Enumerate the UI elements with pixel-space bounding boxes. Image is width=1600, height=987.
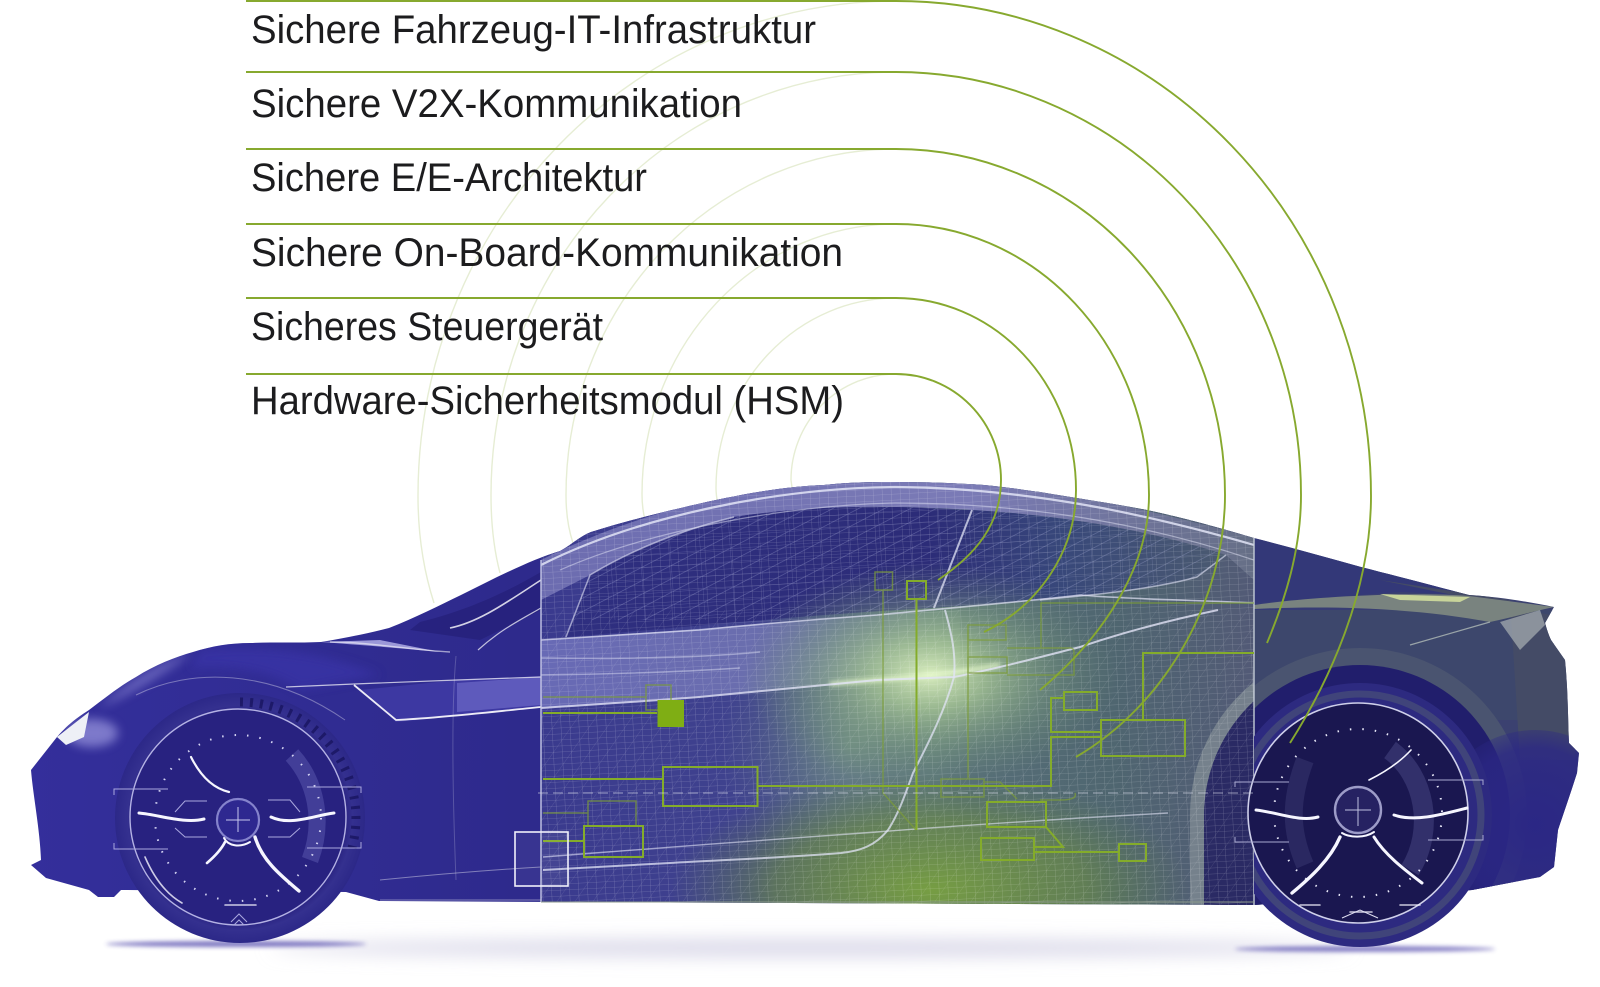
tread marks	[240, 702, 356, 848]
white marker box	[515, 832, 568, 886]
spokes	[139, 757, 334, 905]
brake disc	[292, 755, 317, 860]
spokes	[1256, 750, 1467, 912]
technical brackets	[1235, 780, 1483, 918]
roof band	[541, 478, 1254, 600]
circuit diagram	[543, 572, 1254, 861]
rear body shading	[1254, 538, 1579, 905]
wireframe panel	[541, 470, 1254, 910]
dim modules	[543, 572, 1254, 830]
window glass	[566, 507, 1226, 637]
label: Sichere Fahrzeug-IT-Infrastruktur: Sichere Fahrzeug-IT-Infrastruktur	[251, 8, 816, 52]
leader: on-board communication	[246, 224, 1149, 690]
rear arch in panel	[1190, 682, 1254, 910]
front fender highlights	[66, 572, 541, 747]
rim circle	[130, 709, 346, 925]
body creases	[541, 487, 1254, 870]
leader lines	[246, 1, 1371, 757]
leader: vehicle IT infrastructure	[246, 1, 1371, 743]
rim	[1248, 703, 1468, 923]
rear wheel	[1228, 683, 1492, 947]
label: Sichere V2X-Kommunikation: Sichere V2X-Kommunikation	[251, 82, 742, 126]
wire mesh	[541, 470, 1254, 910]
door belt band	[541, 610, 960, 708]
faint concentric arcs	[418, 1, 896, 603]
module: solid HSM	[658, 700, 684, 727]
technical brackets	[114, 787, 361, 925]
bright modules	[543, 581, 1254, 861]
icon: headlight	[57, 712, 89, 745]
label: Sichere On-Board-Kommunikation: Sichere On-Board-Kommunikation	[251, 231, 843, 275]
ground shadow	[106, 940, 1495, 956]
green glow	[744, 686, 929, 822]
label: Hardware-Sicherheitsmodul (HSM): Hardware-Sicherheitsmodul (HSM)	[251, 379, 844, 423]
glow streak	[830, 665, 1000, 684]
front body lines	[136, 580, 541, 900]
tire	[1254, 683, 1478, 947]
leader: E/E architecture	[246, 149, 1225, 757]
leader: ECU	[246, 298, 1076, 632]
label: Sicheres Steuergerät: Sicheres Steuergerät	[251, 305, 603, 349]
leader: HSM	[246, 374, 1001, 580]
brake detail	[1390, 750, 1424, 870]
panel base	[541, 470, 1254, 910]
leader: V2X	[246, 72, 1301, 643]
panel borders	[541, 538, 1254, 905]
front wheel	[114, 693, 365, 943]
car body	[31, 482, 1579, 905]
tire	[115, 693, 365, 943]
dashed reference line	[538, 792, 1254, 794]
label: Sichere E/E-Architektur: Sichere E/E-Architektur	[251, 156, 647, 200]
